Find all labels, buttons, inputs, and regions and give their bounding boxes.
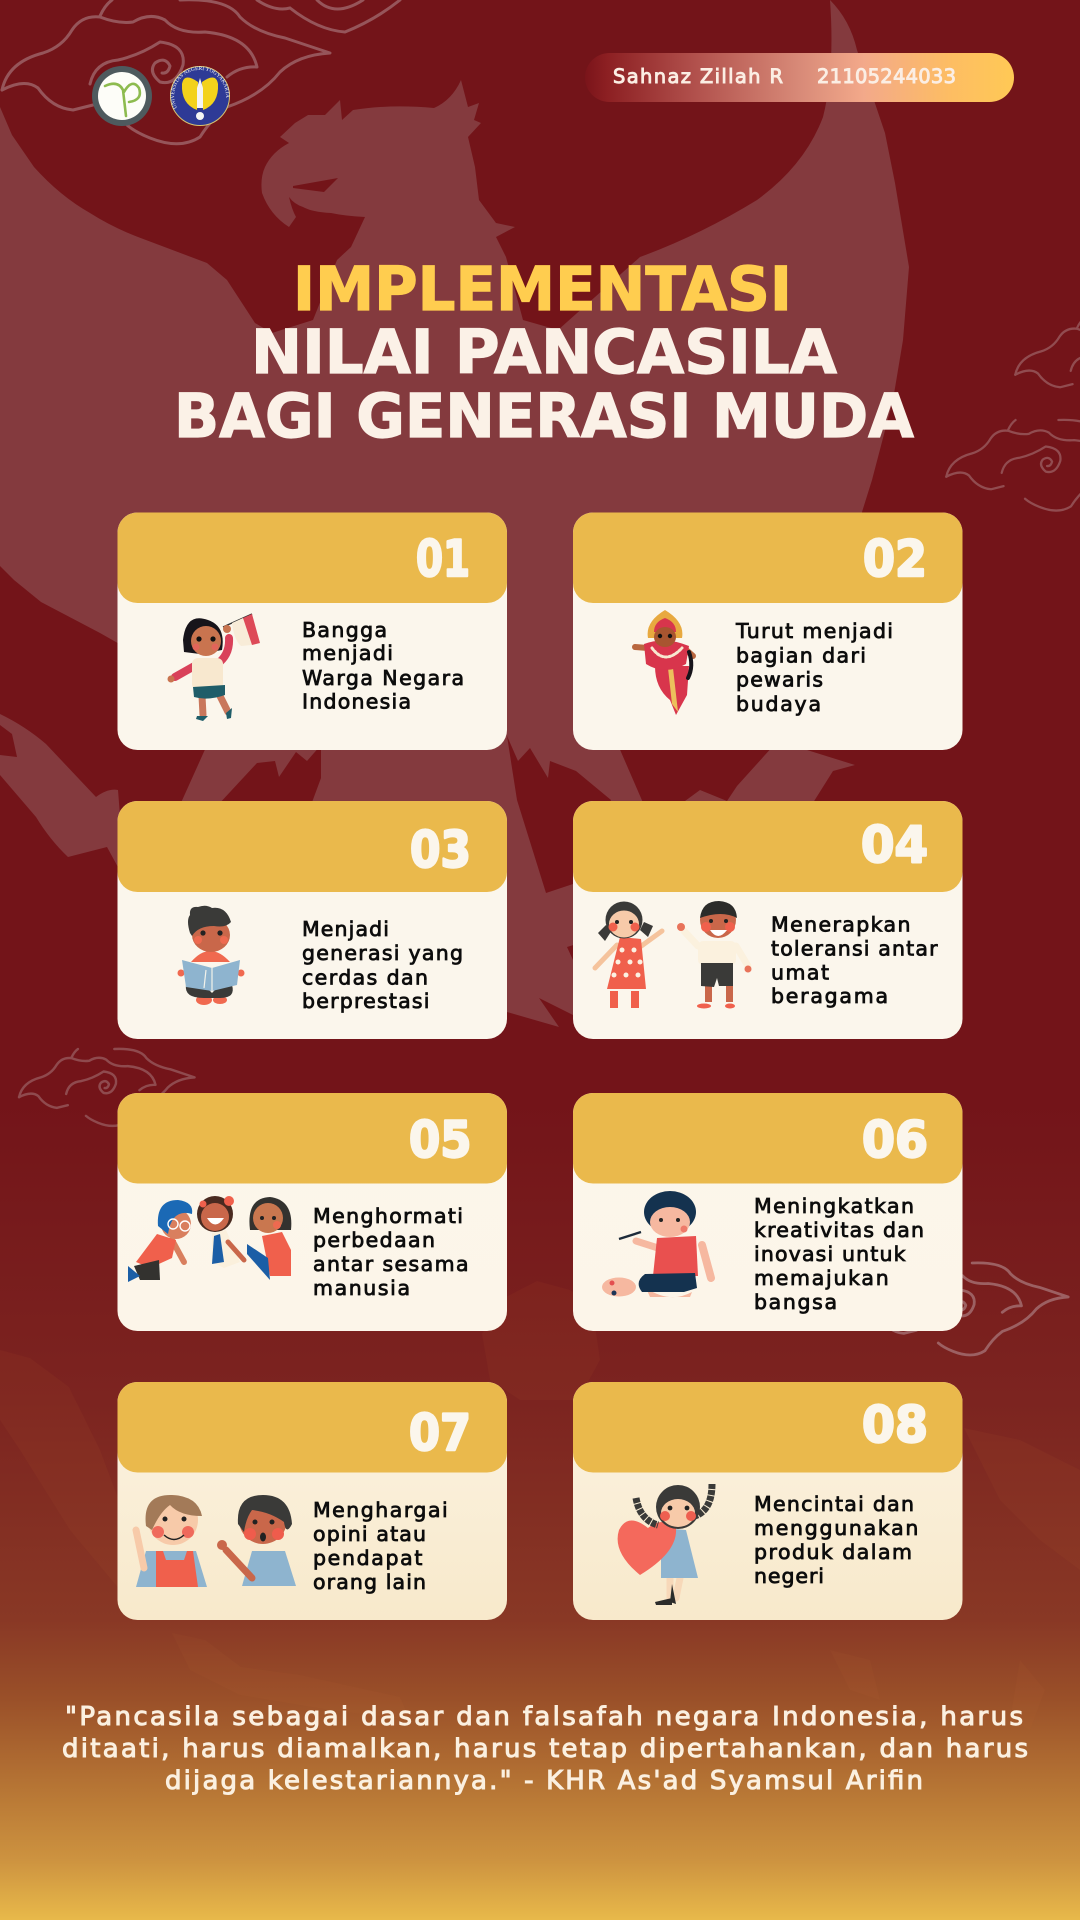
- text: card 03: berprestasi: [302, 989, 430, 1013]
- text: card 01: Bangga: [302, 618, 387, 642]
- text: card 01: [302, 618, 464, 714]
- text: card 08: [754, 1492, 918, 1588]
- quote: [62, 1702, 1028, 1796]
- panel: card 01: [118, 512, 507, 750]
- title: BAGI GENERASI MUDA: [174, 381, 914, 452]
- text: card 05: [313, 1204, 468, 1300]
- name pill: [585, 53, 1014, 102]
- text: card 07: opini atau: [313, 1522, 426, 1546]
- panel: card 05: [118, 1093, 507, 1331]
- text: card 01: menjadi: [302, 641, 393, 665]
- text: card 06: memajukan: [754, 1266, 889, 1290]
- logo: universitas negeri yogyakarta: UNIVERSITAS NEGERI YOGYAKARTA: [170, 66, 230, 110]
- quote: "Pancasila sebagai dasar dan falsafah negara Indonesia, harus: [65, 1702, 1023, 1732]
- indonesia map silhouette: [0, 1281, 1080, 1730]
- text: card 08: negeri: [754, 1564, 824, 1588]
- panel: card 06: [573, 1093, 962, 1331]
- garuda silhouette: [0, 0, 909, 1027]
- text: card 05: Menghormati: [313, 1204, 463, 1228]
- icon: boy reading book: [178, 906, 244, 1005]
- text: card 08: produk dalam: [754, 1540, 912, 1564]
- panel: card 03: [118, 801, 507, 1039]
- text: card 04: toleransi antar: [771, 937, 938, 961]
- quote: dijaga kelestariannya." - KHR As'ad Syamsul Arifin: [165, 1766, 923, 1796]
- clouds: [2, 0, 1080, 1355]
- text: card 03: Menjadi: [302, 917, 389, 941]
- text: card 05: perbedaan: [313, 1228, 435, 1252]
- text: card 02: budaya: [736, 692, 821, 716]
- icon: girl hugging heart: [618, 1484, 712, 1605]
- title: IMPLEMENTASI: [293, 254, 792, 325]
- text: card 06: [754, 1194, 924, 1314]
- text: card 02: Turut menjadi: [735, 619, 893, 643]
- panel: card 08: 08: [862, 1396, 928, 1454]
- panel: card 08: [573, 1382, 962, 1620]
- panel: card 02: 02: [863, 530, 927, 588]
- text: card 08: menggunakan: [754, 1516, 918, 1540]
- name pill: 21105244033: [817, 65, 956, 88]
- text: card 04: Menerapkan: [771, 913, 910, 937]
- panel: card 05: 05: [409, 1111, 472, 1169]
- text: card 02: pewaris: [736, 668, 823, 692]
- text: card 07: [313, 1498, 448, 1594]
- icon: girl and boy waving: [595, 901, 752, 1008]
- panel: card 04: [573, 801, 962, 1039]
- text: card 06: inovasi untuk: [754, 1242, 906, 1266]
- logo: program study badge: [92, 66, 152, 126]
- text: card 03: cerdas dan: [302, 965, 428, 989]
- title: NILAI PANCASILA: [251, 317, 837, 388]
- panel: card 06: 06: [862, 1111, 928, 1169]
- icon: two kids talking: [136, 1495, 296, 1587]
- panel: card 04: 04: [861, 816, 928, 874]
- quote: ditaati, harus diamalkan, harus tetap dipertahankan, dan harus: [62, 1734, 1028, 1764]
- panel: card 07: 07: [409, 1404, 471, 1462]
- text: card 02: [735, 619, 893, 716]
- panel: card 02: [573, 512, 962, 750]
- text: card 05: manusia: [313, 1276, 410, 1300]
- text: card 03: [302, 917, 463, 1013]
- text: card 04: umat: [771, 960, 829, 984]
- text: card 04: [771, 913, 938, 1008]
- text: card 04: beragama: [771, 984, 888, 1008]
- text: card 06: kreativitas dan: [754, 1218, 924, 1242]
- text: card 03: generasi yang: [302, 941, 463, 965]
- text: card 07: orang lain: [313, 1570, 426, 1594]
- panel: card 01: 01: [416, 530, 470, 588]
- icon: girl with flag: [168, 614, 260, 721]
- text: card 05: antar sesama: [313, 1252, 468, 1276]
- text: card 06: Meningkatkan: [754, 1194, 914, 1218]
- title: [174, 254, 914, 452]
- text: card 07: pendapat: [313, 1546, 422, 1570]
- text: card 08: Mencintai dan: [754, 1492, 914, 1516]
- text: card 01: Indonesia: [302, 690, 411, 714]
- panel: card 03: 03: [410, 821, 471, 879]
- garuda cut-outs: [0, 178, 611, 962]
- icon: boy painting: [602, 1191, 711, 1297]
- icon: three kids together: [128, 1196, 291, 1282]
- text: card 02: bagian dari: [736, 644, 866, 668]
- text: card 06: bangsa: [754, 1290, 837, 1314]
- name pill: Sahnaz Zillah R: [613, 65, 783, 88]
- text: card 07: Menghargai: [313, 1498, 448, 1522]
- icon: traditional dancer: [635, 610, 693, 715]
- text: card 01: Warga Negara: [302, 666, 464, 690]
- panel: card 07: [118, 1382, 507, 1620]
